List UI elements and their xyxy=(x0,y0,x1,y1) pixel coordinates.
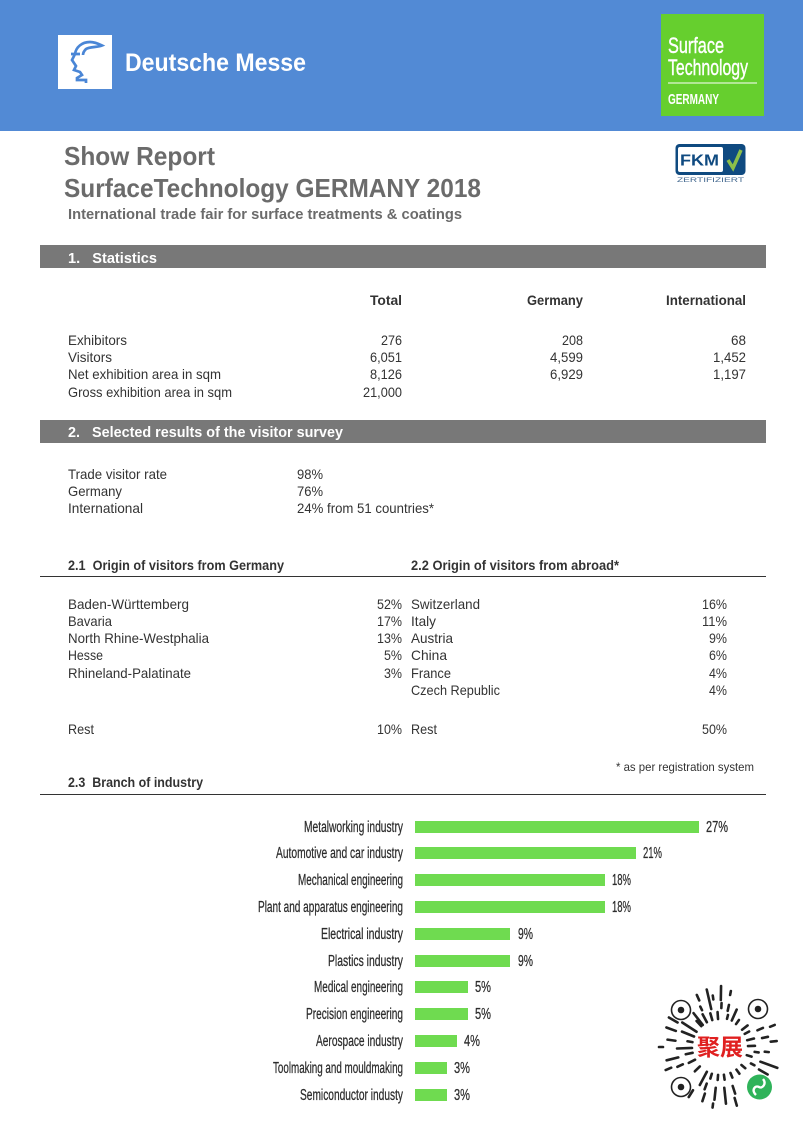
table header: Total xyxy=(370,292,402,308)
list: origin abroad: 4% xyxy=(709,682,727,698)
bar: plastics: Plastics industry xyxy=(328,953,403,970)
row: exhibitors: Exhibitors xyxy=(68,332,127,348)
list: origin Germany: Hesse xyxy=(68,647,103,663)
footnote: * as per registration system xyxy=(616,760,754,774)
text block: visitor rates: 98% xyxy=(297,466,323,482)
bar: medical: Medical engineering xyxy=(314,979,403,996)
row: visitors: Visitors xyxy=(68,349,112,365)
table header: International xyxy=(666,292,746,308)
list: origin abroad: 16% xyxy=(702,596,727,612)
QR centre brand text: 聚展 xyxy=(697,1028,743,1062)
bar: medical: 5% xyxy=(475,979,491,996)
icon: FKM certified badge xyxy=(676,144,746,184)
list: origin abroad: Austria xyxy=(411,630,453,646)
QR mini-program badge xyxy=(747,1074,772,1100)
bar: semiconductor: 3% xyxy=(454,1087,470,1104)
section bar: Statistics xyxy=(40,245,766,268)
bar: electrical xyxy=(321,926,533,943)
subtitle: International trade fair for surface treatments & coatings xyxy=(68,207,462,223)
bar: mechanical: Mechanical engineering xyxy=(298,872,403,889)
bar: plant xyxy=(258,899,631,916)
title: SurfaceTechnology GERMANY 2018 xyxy=(64,173,481,203)
list: origin abroad: 6% xyxy=(709,647,727,663)
logo: Deutsche Messe: Deutsche Messe xyxy=(125,49,306,77)
icon: mini-program QR code xyxy=(659,986,777,1108)
row: net area xyxy=(68,366,746,382)
row: net area: Net exhibition area in sqm xyxy=(68,366,221,382)
row: visitors: 6,051 xyxy=(370,349,402,365)
subheading 2.3: 2.3 Branch of industry xyxy=(68,774,203,790)
row: net area: 6,929 xyxy=(550,366,583,382)
bar: metalworking: Metalworking industry xyxy=(304,819,403,836)
bar: metalworking xyxy=(304,819,728,836)
bar: plant: Plant and apparatus engineering xyxy=(258,899,403,916)
list: origin Germany: Rest xyxy=(68,721,94,737)
list: origin Germany: 3% xyxy=(384,665,402,681)
list: origin Germany: Baden-Württemberg xyxy=(68,596,189,612)
list: origin abroad: Switzerland xyxy=(411,596,480,612)
list: origin Germany: Bavaria xyxy=(68,613,112,629)
list: origin Germany xyxy=(68,596,402,737)
logo: SurfaceTechnology Germany: Technology xyxy=(668,55,748,80)
bar: toolmaking: Toolmaking and mouldmaking xyxy=(273,1060,403,1077)
list: origin abroad: Italy xyxy=(411,613,436,629)
bar: plastics xyxy=(328,953,533,970)
list: origin abroad: China xyxy=(411,647,447,663)
bar chart: branch of industry xyxy=(258,819,728,1104)
list: origin abroad: 9% xyxy=(709,630,727,646)
list: origin Germany: 5% xyxy=(384,647,402,663)
table: statistics xyxy=(68,292,746,400)
list: origin abroad: 11% xyxy=(702,613,727,629)
title xyxy=(64,141,481,203)
subheadings 2.1 and 2.2: 2.1 Origin of visitors from Germany xyxy=(68,557,284,573)
row: visitors: 1,452 xyxy=(713,349,746,365)
bar: aerospace: Aerospace industry xyxy=(316,1033,403,1050)
logo: Deutsche Messe xyxy=(58,35,306,89)
bar: metalworking: 27% xyxy=(706,819,728,836)
bar: electrical: 9% xyxy=(518,926,533,943)
bar: plant: 18% xyxy=(612,899,631,916)
row: exhibitors: 276 xyxy=(381,332,402,348)
list: origin Germany: North Rhine-Westphalia xyxy=(68,630,209,646)
row: exhibitors: 68 xyxy=(731,332,746,348)
table header: Germany xyxy=(527,292,583,308)
title: Show Report xyxy=(64,141,215,171)
logo: SurfaceTechnology Germany: Surface xyxy=(668,33,724,58)
list: origin Germany: 10% xyxy=(377,721,402,737)
list: origin abroad: Czech Republic xyxy=(411,682,500,698)
text block: visitor rates: Trade visitor rate xyxy=(68,466,167,482)
row: net area: 8,126 xyxy=(370,366,402,382)
header banner xyxy=(0,0,803,131)
bar: automotive: Automotive and car industry xyxy=(276,845,403,862)
text block: visitor rates: International xyxy=(68,500,143,516)
list: origin abroad: 4% xyxy=(709,665,727,681)
text block: visitor rates: Germany xyxy=(68,483,122,499)
QR finder marks xyxy=(672,1000,768,1096)
row: gross area xyxy=(68,384,402,400)
text block: visitor rates: 24% from 51 countries* xyxy=(297,500,435,516)
row: visitors: 4,599 xyxy=(550,349,583,365)
list: origin Germany: Rhineland-Palatinate xyxy=(68,665,191,681)
bar: automotive xyxy=(276,845,662,862)
icon: FKM certified badge: ZERTIFIZIERT xyxy=(677,178,745,184)
list: origin abroad: 50% xyxy=(702,721,727,737)
subheadings 2.1 and 2.2: 2.2 Origin of visitors from abroad* xyxy=(411,557,619,573)
row: gross area: 21,000 xyxy=(363,384,402,400)
row: visitors xyxy=(68,349,746,365)
section bar: Statistics: 1. Statistics xyxy=(68,251,157,267)
list: origin abroad xyxy=(411,596,727,737)
section bar: survey xyxy=(40,420,766,443)
row: gross area: Gross exhibition area in sqm xyxy=(68,384,232,400)
subheadings 2.1 and 2.2 xyxy=(40,557,766,577)
text block: visitor rates xyxy=(68,466,435,516)
table header xyxy=(370,292,746,308)
list: origin Germany: 52% xyxy=(377,596,402,612)
section bar: survey: 2. Selected results of the visitor survey xyxy=(68,425,343,441)
bar: automotive: 21% xyxy=(643,845,662,862)
bar: toolmaking: 3% xyxy=(454,1060,470,1077)
list: origin Germany: 17% xyxy=(377,613,402,629)
list: origin Germany: 13% xyxy=(377,630,402,646)
list: origin abroad: France xyxy=(411,665,451,681)
bar: plastics: 9% xyxy=(518,953,533,970)
bar: precision: Precision engineering xyxy=(306,1006,403,1023)
bar: semiconductor: Semiconductor industy xyxy=(300,1087,403,1104)
logo: SurfaceTechnology Germany xyxy=(661,14,764,116)
row: net area: 1,197 xyxy=(713,366,746,382)
bar: precision: 5% xyxy=(475,1006,491,1023)
icon: FKM certified badge: FKM xyxy=(680,152,719,170)
row: exhibitors: 208 xyxy=(562,332,583,348)
row: exhibitors xyxy=(68,332,746,348)
bar: electrical: Electrical industry xyxy=(321,926,403,943)
bar: mechanical xyxy=(298,872,631,889)
text block: visitor rates: 76% xyxy=(297,483,323,499)
bar: aerospace: 4% xyxy=(464,1033,480,1050)
bar: mechanical: 18% xyxy=(612,872,631,889)
list: origin abroad: Rest xyxy=(411,721,437,737)
logo: SurfaceTechnology Germany: GERMANY xyxy=(668,91,719,108)
